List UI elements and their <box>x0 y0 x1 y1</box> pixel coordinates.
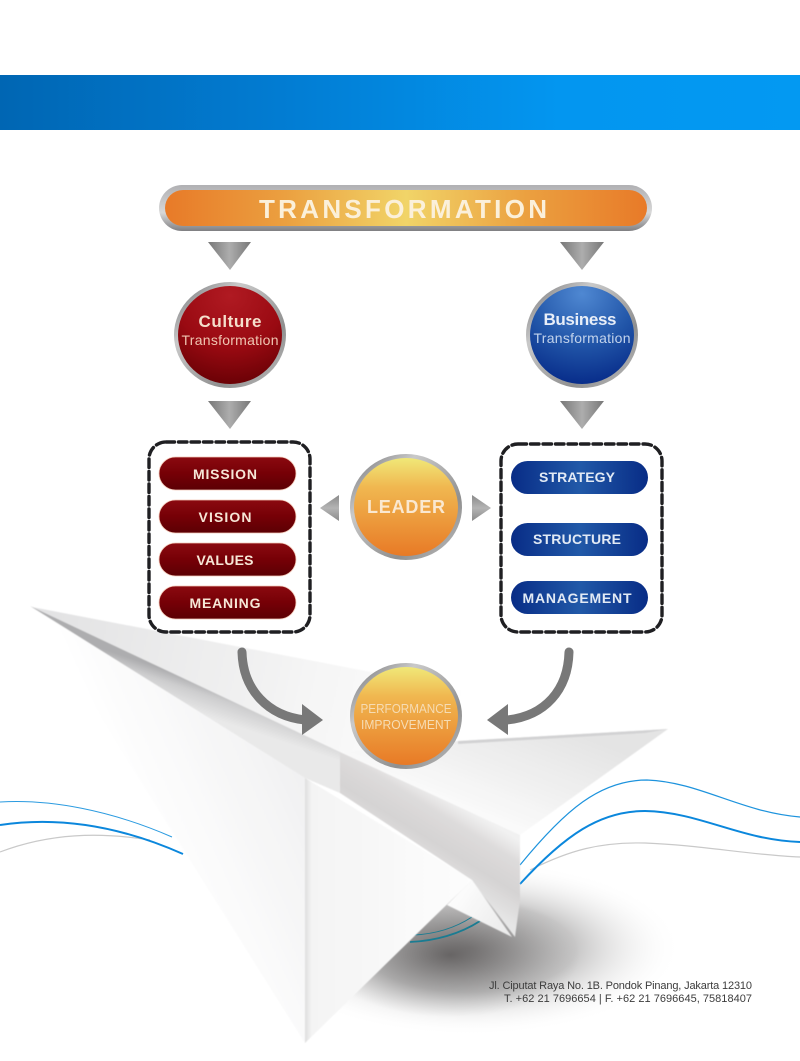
pill: structure: STRUCTURE <box>533 531 621 547</box>
circle: leader <box>350 454 462 560</box>
plane: far wing crease shadow <box>458 729 668 744</box>
improvement label: IMPROVEMENT <box>361 717 451 732</box>
culture label: Culture <box>198 312 262 331</box>
arrow: leader to culture list <box>320 495 339 521</box>
pill: management <box>511 581 648 614</box>
plane: upper far wing <box>32 607 668 752</box>
plane: small under-fold <box>447 880 512 937</box>
business label: Business <box>544 310 616 329</box>
pill: values <box>159 543 296 576</box>
panel: culture list <box>149 442 310 632</box>
under-plane swoosh lines <box>410 917 480 942</box>
pill: vision <box>159 500 296 533</box>
pill: meaning: MEANING <box>190 595 261 611</box>
phone and fax line: T. +62 21 7696654 | F. +62 21 7696645, 75818407 <box>504 993 752 1005</box>
circle: culture transformation <box>174 282 286 388</box>
circle: business transformation <box>526 282 638 388</box>
pill: structure <box>511 523 648 556</box>
leader label: LEADER <box>367 497 445 517</box>
arrow: down to culture <box>208 242 251 270</box>
pill: strategy <box>511 461 648 494</box>
plane: right wing <box>340 729 668 835</box>
plane: main near wing <box>30 606 305 1043</box>
title bar <box>159 185 652 231</box>
panel: business list <box>501 444 662 632</box>
circle: performance improvement <box>350 663 462 769</box>
curved arrow: business list to performance <box>487 652 569 735</box>
header band <box>0 75 800 130</box>
address line: Jl. Ciputat Raya No. 1B. Pondok Pinang, Jakarta 12310 <box>489 980 752 992</box>
culture sublabel: Transformation <box>182 332 278 348</box>
pill: mission: MISSION <box>193 466 257 482</box>
footer address <box>489 980 752 1005</box>
performance label: PERFORMANCE <box>360 701 452 716</box>
arrow: leader to business list <box>472 495 491 521</box>
pill: strategy: STRATEGY <box>539 469 616 485</box>
arrow: down to culture list <box>208 401 251 429</box>
plane: keel front face <box>340 752 520 937</box>
curved arrow: culture list to performance <box>242 652 323 735</box>
pill: mission <box>159 457 296 490</box>
paper plane <box>30 606 668 1043</box>
pill: management: MANAGEMENT <box>522 590 632 606</box>
title text: TRANSFORMATION <box>259 194 547 224</box>
business sublabel: Transformation <box>534 330 630 346</box>
arrow: down to business list <box>560 401 604 429</box>
right swoosh lines <box>520 780 800 884</box>
pill: vision: VISION <box>198 509 252 525</box>
pill: values: VALUES <box>196 552 254 568</box>
plane: keel band <box>30 606 340 793</box>
plane: front near panel <box>305 778 472 1043</box>
left swoosh lines <box>0 802 183 854</box>
ground shadow of plane <box>258 860 682 1036</box>
pill: meaning <box>159 586 296 619</box>
arrow: down to business <box>560 242 604 270</box>
